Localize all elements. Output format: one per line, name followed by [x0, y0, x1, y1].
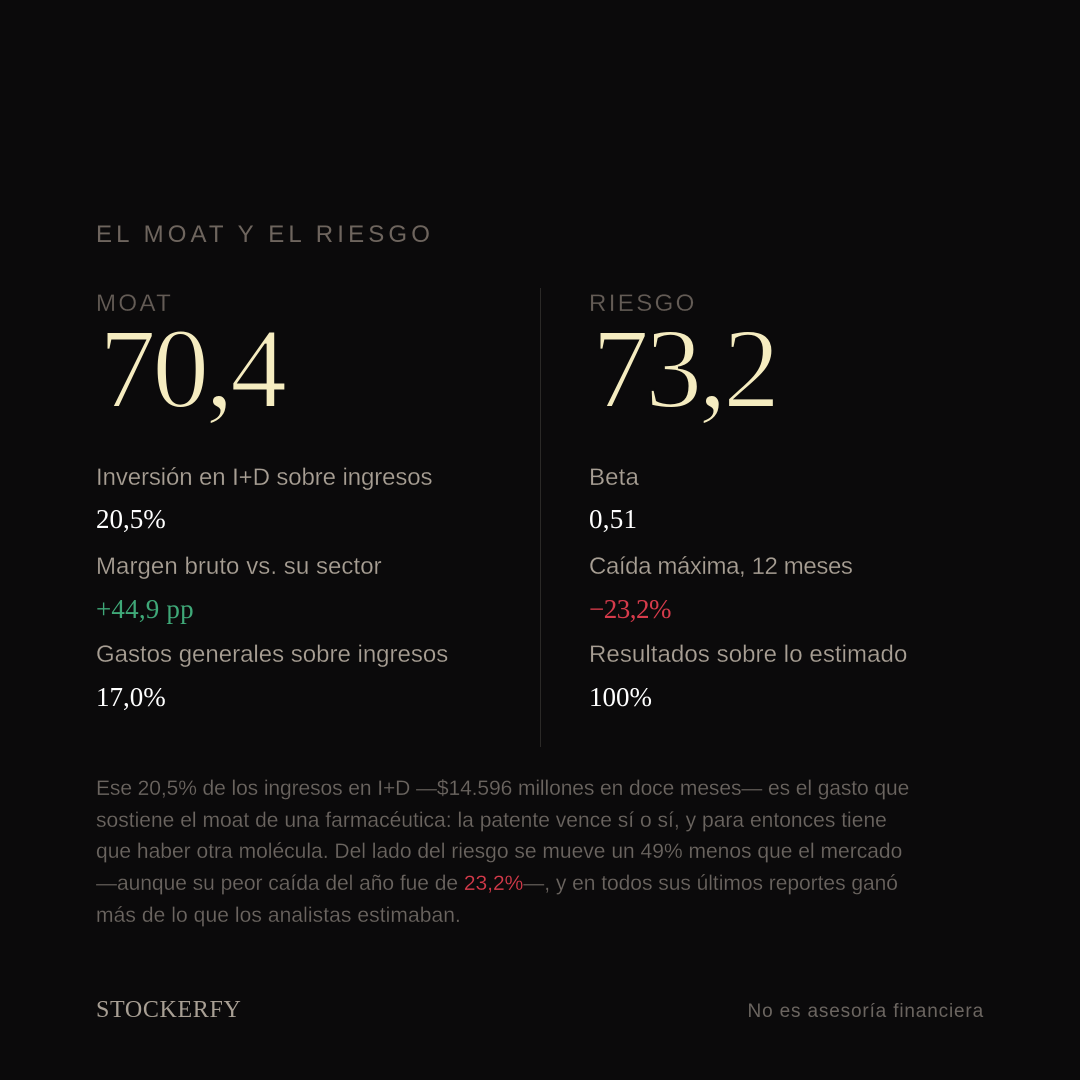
metric value: I+D: 20,5%: [96, 504, 166, 534]
brand: STOCKERFY: [96, 997, 241, 1023]
moat label: MOAT: [96, 290, 173, 317]
metric value: margen: +44,9 pp: [96, 594, 194, 624]
body text: Ese 20,5% de los ingresos en I+D —$14.596 millones en doce meses— es el gasto que: [96, 777, 909, 800]
body text: que haber otra molécula. Del lado del riesgo se mueve un 49% menos que el mercado: [96, 840, 902, 863]
metric label: resultados: Resultados sobre lo estimado: [589, 641, 907, 668]
panel: riesgo: [589, 290, 907, 712]
body text: —aunque su peor caída del año fue de 23,2%—, y en todos sus últimos reportes ganó: [96, 872, 898, 895]
metric label: margen: Margen bruto vs. su sector: [96, 553, 382, 580]
metric label: gastos: Gastos generales sobre ingresos: [96, 641, 448, 668]
column divider: [540, 288, 541, 747]
title: EL MOAT Y EL RIESGO: [96, 221, 434, 248]
disclaimer: No es asesoría financiera: [748, 1001, 984, 1022]
metric label: I+D: Inversión en I+D sobre ingresos: [96, 464, 432, 491]
panel: moat: [96, 290, 448, 712]
riesgo score: 73,2: [592, 305, 776, 432]
metric value: gastos: 17,0%: [96, 682, 166, 712]
moat score: 70,4: [99, 305, 283, 432]
metric value: beta: 0,51: [589, 504, 637, 534]
metric label: beta: Beta: [589, 464, 639, 491]
metric value: caída: −23,2%: [589, 594, 671, 624]
body text: más de lo que los analistas estimaban.: [96, 904, 461, 927]
body text: sostiene el moat de una farmacéutica: la patente vence sí o sí, y para entonces tiene: [96, 809, 887, 832]
metric label: caída: Caída máxima, 12 meses: [589, 553, 853, 580]
body text: [96, 777, 909, 927]
metric value: resultados: 100%: [589, 682, 652, 712]
riesgo label: RIESGO: [589, 290, 697, 317]
